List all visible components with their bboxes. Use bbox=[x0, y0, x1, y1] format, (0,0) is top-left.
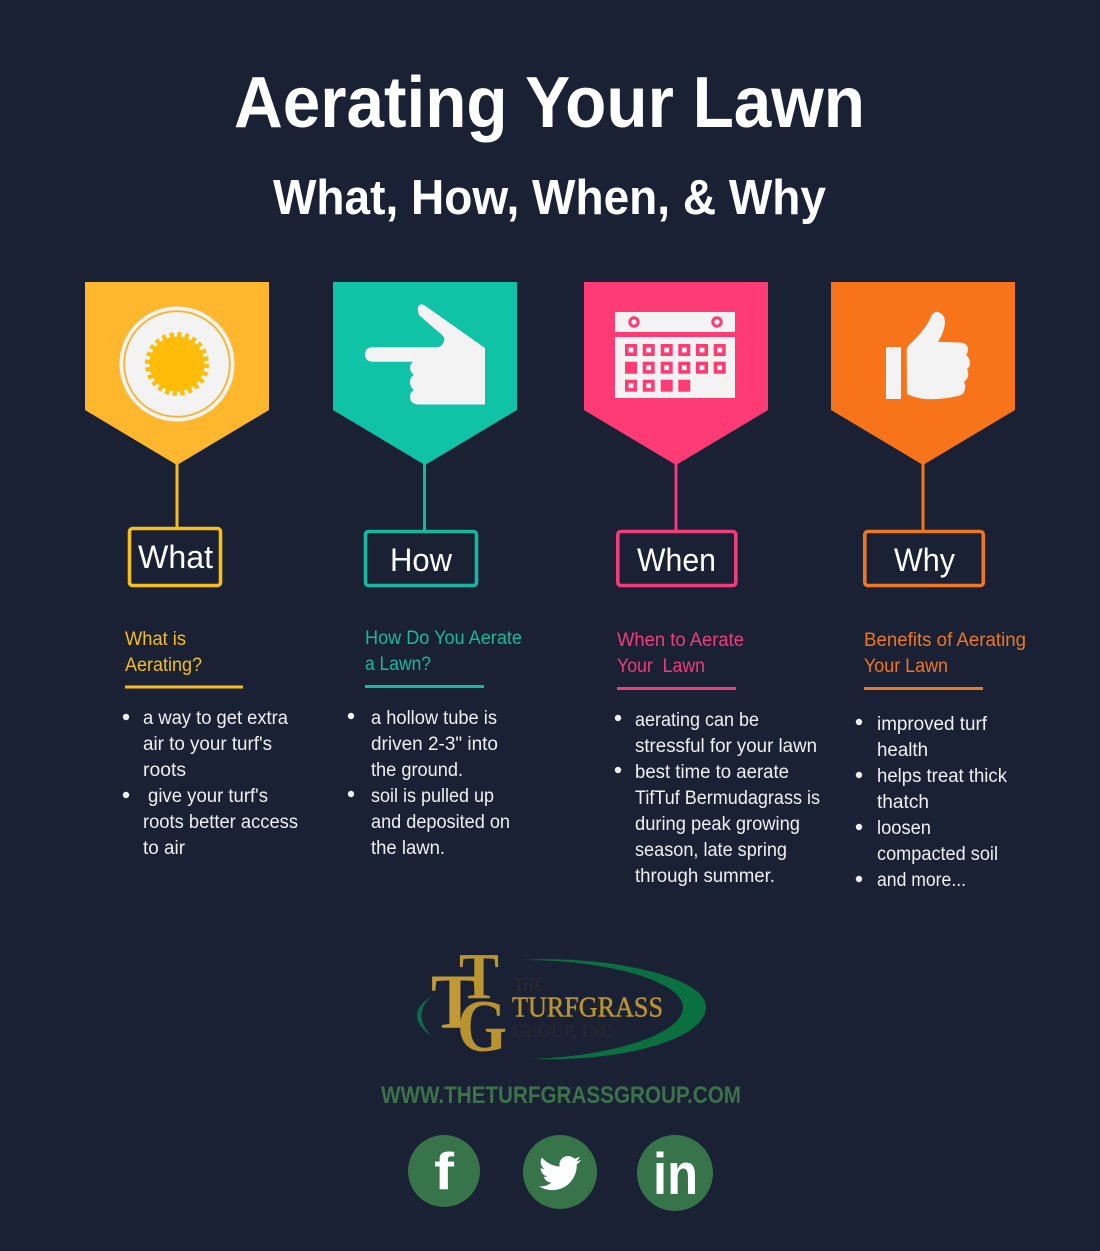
badge: why bbox=[831, 282, 1015, 465]
connector: when bbox=[674, 464, 678, 531]
logo: the turfgrass group: T bbox=[459, 940, 499, 1013]
text block: what list: give your turf's bbox=[148, 786, 268, 807]
text block: what list: to air bbox=[143, 838, 186, 859]
heading: when to aerate: Your Lawn bbox=[617, 656, 705, 677]
heading: when to aerate bbox=[617, 630, 744, 690]
icon: facebook bbox=[408, 1135, 480, 1207]
logo: the turfgrass group bbox=[417, 940, 706, 1068]
label box: when: When bbox=[637, 542, 716, 578]
text block: when list: season, late spring bbox=[635, 840, 787, 861]
text block: when list: aerating can be bbox=[635, 710, 759, 731]
text block: how list: the lawn. bbox=[371, 838, 445, 859]
label box: how bbox=[366, 532, 476, 586]
logo: the turfgrass group: G bbox=[457, 986, 507, 1068]
panel: how bbox=[333, 282, 522, 859]
label box: how: How bbox=[390, 542, 453, 578]
text block: when list bbox=[615, 710, 820, 887]
label box: when bbox=[618, 532, 736, 586]
heading: how do you aerate bbox=[365, 628, 522, 688]
text block: how list: the ground. bbox=[371, 760, 463, 781]
text block: how list: driven 2-3" into bbox=[371, 734, 498, 755]
heading: when to aerate: When to Aerate bbox=[617, 630, 744, 651]
text block: why list: loosen bbox=[877, 818, 931, 839]
label box: what bbox=[130, 528, 220, 586]
text block: why list bbox=[856, 714, 1007, 891]
icon: facebook: f bbox=[434, 1143, 455, 1201]
panel: why bbox=[831, 282, 1026, 891]
subtitle: What, How, When, & Why bbox=[273, 171, 826, 225]
heading: benefits of aerating: Your Lawn bbox=[864, 656, 948, 677]
text block: when list: through summer. bbox=[635, 866, 775, 887]
text block: why list: health bbox=[877, 740, 928, 761]
text block: when list: best time to aerate bbox=[635, 762, 789, 783]
text block: how list: soil is pulled up bbox=[371, 786, 494, 807]
label box: why: Why bbox=[894, 542, 955, 578]
icon: twitter bbox=[523, 1135, 597, 1209]
heading: what is aerating bbox=[125, 629, 243, 688]
text block: why list: and more... bbox=[877, 870, 966, 891]
heading: how do you aerate: How Do You Aerate bbox=[365, 628, 522, 649]
logo: the turfgrass group: GROUP, INC bbox=[513, 1021, 613, 1042]
label box: why bbox=[865, 532, 983, 586]
icon: linkedin: in bbox=[653, 1142, 698, 1207]
text block: what list bbox=[123, 708, 298, 859]
connector: what bbox=[176, 464, 178, 528]
connector: how bbox=[423, 464, 426, 531]
text block: why list: compacted soil bbox=[877, 844, 998, 865]
icon: calendar bbox=[615, 312, 735, 398]
icon: thumbs up bbox=[886, 312, 970, 399]
panel: what bbox=[85, 282, 298, 859]
heading: benefits of aerating: Benefits of Aerating bbox=[864, 630, 1026, 651]
text block: why list: improved turf bbox=[877, 714, 988, 735]
connector: why bbox=[922, 464, 924, 531]
badge: when bbox=[584, 282, 768, 465]
icon: sun bbox=[120, 306, 234, 422]
text block: what list: a way to get extra bbox=[143, 708, 288, 729]
text block: when list: stressful for your lawn bbox=[635, 736, 817, 757]
heading: how do you aerate: a Lawn? bbox=[365, 654, 431, 675]
icon: pointing hand bbox=[365, 304, 485, 404]
text block: what list: roots better access bbox=[143, 812, 298, 833]
text block: why list: thatch bbox=[877, 792, 929, 813]
text block: when list: during peak growing bbox=[635, 814, 800, 835]
title: Aerating Your Lawn bbox=[234, 63, 865, 143]
text block: why list: helps treat thick bbox=[877, 766, 1007, 787]
heading: what is aerating: What is bbox=[125, 629, 186, 650]
heading: what is aerating: Aerating? bbox=[125, 655, 202, 676]
logo: the turfgrass group: THE bbox=[514, 974, 543, 996]
heading: benefits of aerating bbox=[864, 630, 1026, 690]
label box: what: What bbox=[138, 539, 213, 575]
text block: how list: and deposited on bbox=[371, 812, 510, 833]
text block: when list: TifTuf Bermudagrass is bbox=[635, 788, 820, 809]
badge: what bbox=[85, 282, 269, 465]
text block: what list: roots bbox=[143, 760, 186, 781]
panel: when bbox=[584, 282, 820, 887]
text block: how list: a hollow tube is bbox=[371, 708, 497, 729]
logo: the turfgrass group: TURFGRASS bbox=[512, 992, 663, 1024]
text block: what list: air to your turf's bbox=[143, 734, 272, 755]
logo: the turfgrass group: T bbox=[431, 958, 479, 1045]
text block: how list bbox=[348, 708, 510, 859]
badge: how bbox=[333, 282, 517, 465]
website url: WWW.THETURFGRASSGROUP.COM bbox=[381, 1082, 741, 1109]
icon: linkedin bbox=[637, 1135, 713, 1211]
